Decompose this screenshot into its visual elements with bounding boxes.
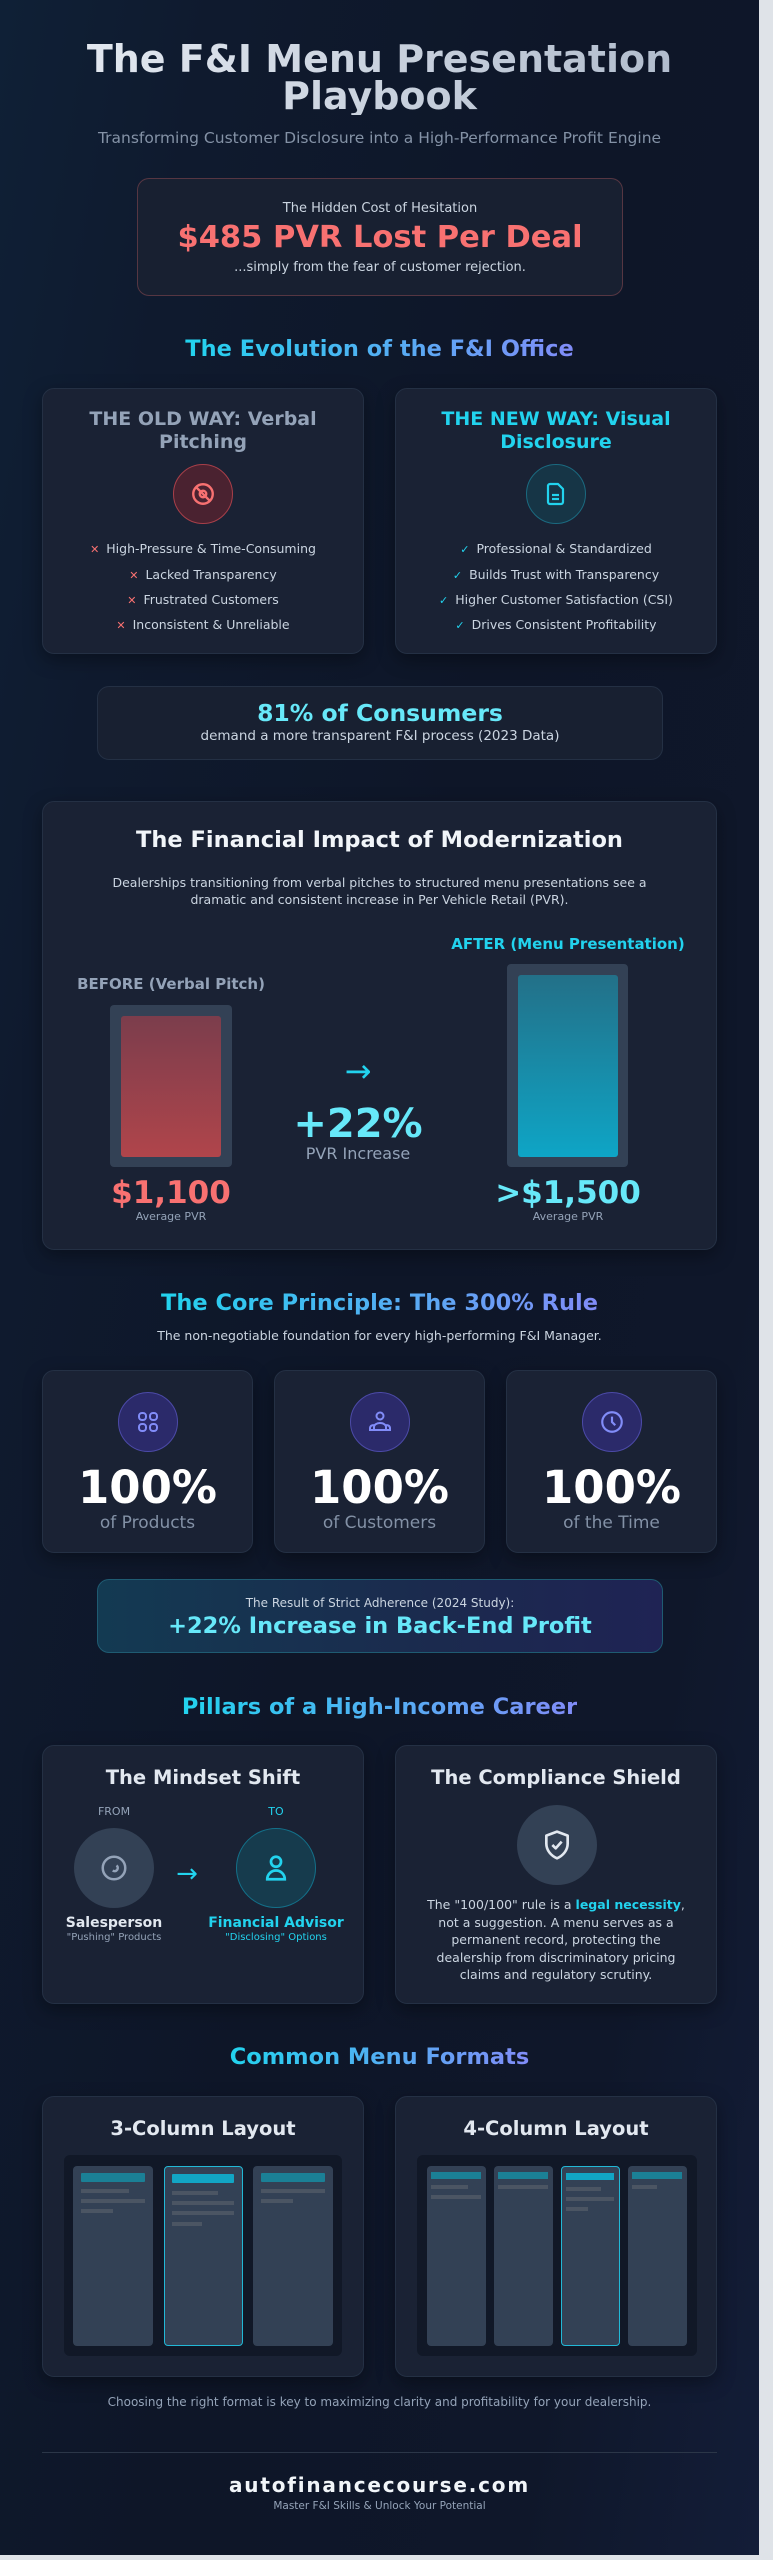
chart: after bar: AFTER (Menu Presentation) [451,935,685,953]
panel: old way: THE OLD WAY: Verbal [89,408,317,430]
panel: mindset shift: TO [268,1805,284,1818]
panel: new way: ✓ Builds Trust with Transparency [453,567,659,582]
panel: 4-column layout [395,2096,717,2377]
panel: compliance shield: permanent record, protecting the [451,1932,661,1947]
callout: hidden cost: The Hidden Cost of Hesitation [283,201,477,216]
panel: compliance shield: not a suggestion. A menu serves as a [438,1915,674,1930]
panel: mindset shift [42,1745,364,2004]
footer: autofinancecourse.com [229,2473,530,2497]
panel: new way: ✓ Professional & Standardized [460,541,652,556]
panel: compliance shield [395,1745,717,2004]
callout: result [97,1579,663,1653]
footer [229,2473,530,2512]
panel: mindset shift: The Mindset Shift [106,1766,300,1789]
stat: +22%: +22% [293,1101,423,1147]
callout: 81% [97,686,663,760]
heading: pillars: Pillars of a High-Income Career [182,1694,577,1720]
icon: salesperson [74,1828,154,1908]
arrow: → [176,1859,198,1889]
panel: financial impact: The Financial Impact of Modernization [136,827,623,853]
panel: financial impact: Dealerships transitioning from verbal pitches to structured menu presentations see a [112,875,647,890]
panel: new way: THE NEW WAY: Visual [441,408,671,430]
title [0,41,759,115]
panel: new way [395,388,717,654]
subtitle: Transforming Customer Disclosure into a High-Performance Profit Engine [98,129,661,147]
heading: evolution: The Evolution of the F&I Office [185,336,574,362]
panel: financial impact [42,801,717,1250]
panel: old way: ✕ Frustrated Customers [127,592,279,607]
callout: result: The Result of Strict Adherence (2024 Study): [246,1596,514,1610]
chart: before bar: $1,100 [111,1175,231,1211]
panel: old way: Pitching [159,431,247,453]
diagram: 4 columns [417,2155,697,2356]
panel: time: 100% [542,1461,681,1514]
panel: new way: ✓ Higher Customer Satisfaction (CSI) [439,592,673,607]
panel: products: 100% [78,1461,217,1514]
panel: new way: Disclosure [500,431,612,453]
panel: mindset shift: FROM [98,1805,130,1818]
panel: old way: ✕ Inconsistent & Unreliable [116,617,290,632]
panel: compliance shield: The Compliance Shield [431,1766,681,1789]
callout: 81%: 81% of Consumers [257,699,503,727]
arrow: → [345,1052,371,1090]
callout: 81%: demand a more transparent F&I process (2023 Data) [201,728,559,744]
panel: customers [274,1370,485,1553]
panel: new way: ✓ Drives Consistent Profitability [455,617,657,632]
panel: compliance shield: claims and regulatory scrutiny. [460,1967,652,1982]
icon: shield [517,1805,597,1885]
panel: products: of Products [100,1513,195,1533]
subheading: The non-negotiable foundation for every high-performing F&I Manager. [157,1328,602,1343]
panel: mindset shift: Financial Advisor [208,1915,344,1931]
callout: result: +22% Increase in Back-End Profit [168,1613,592,1639]
icon: advisor [236,1828,316,1908]
chart: before bar: Average PVR [136,1210,206,1223]
chart: after bar: >$1,500 [495,1175,641,1211]
icon: people [350,1392,410,1452]
callout: hidden cost: $485 PVR Lost Per Deal [177,220,583,255]
panel: compliance shield: The "100/100" rule is a legal necessity, [427,1897,685,1912]
panel: customers: of Customers [323,1513,436,1533]
panel: mindset shift: "Disclosing" Options [225,1932,327,1943]
panel: old way: ✕ High-Pressure & Time-Consuming [90,541,316,556]
callout: hidden cost: ...simply from the fear of customer rejection. [234,260,526,275]
panel: 3-column layout [42,2096,364,2377]
panel: products [42,1370,253,1553]
chart: after bar [451,935,685,1223]
panel: old way: ✕ Lacked Transparency [129,567,277,582]
chart: after bar: Average PVR [533,1210,603,1223]
panel: 4-column layout: 4-Column Layout [463,2117,649,2140]
panel: financial impact: dramatic and consistent increase in Per Vehicle Retail (PVR). [190,892,568,907]
panel: mindset shift: "Pushing" Products [67,1932,161,1943]
icon: clock [582,1392,642,1452]
chart: before bar [77,975,265,1223]
panel: customers: 100% [310,1461,449,1514]
footer: Master F&I Skills & Unlock Your Potential [273,2500,486,2512]
panel: time: of the Time [563,1513,660,1533]
diagram: 3 columns [64,2155,342,2356]
icon: no [173,464,233,524]
heading: core principle: The Core Principle: The 300% Rule [161,1290,598,1316]
title: Playbook [282,74,477,118]
stat: +22%: PVR Increase [306,1144,410,1163]
panel: old way [42,388,364,654]
panel: compliance shield: dealership from discriminatory pricing [437,1950,675,1965]
heading: menu formats: Common Menu Formats [230,2044,529,2070]
panel: time [506,1370,717,1553]
title: The F&I Menu Presentation [87,37,672,81]
caption: Choosing the right format is key to maximizing clarity and profitability for your dealership. [108,2395,651,2409]
icon: document [526,464,586,524]
panel: mindset shift: Salesperson [66,1915,162,1931]
icon: grid [118,1392,178,1452]
panel: 3-column layout: 3-Column Layout [110,2117,296,2140]
chart: before bar: BEFORE (Verbal Pitch) [77,975,265,993]
callout: hidden cost [137,178,623,296]
